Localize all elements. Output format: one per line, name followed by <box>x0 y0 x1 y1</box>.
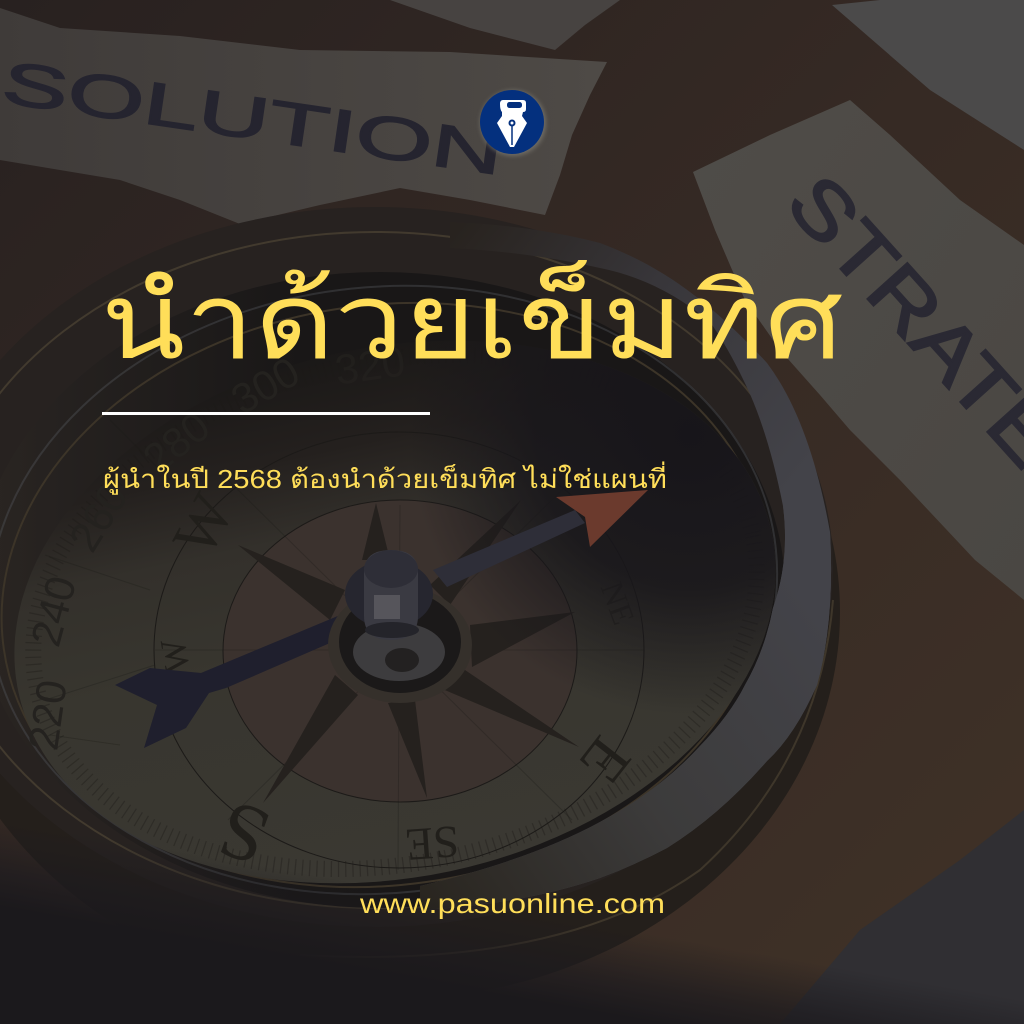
compass needle red tip <box>556 490 648 547</box>
title: นำด้วยเข็มทิศ <box>101 259 843 381</box>
compass dial <box>0 273 827 951</box>
compass bearings: 320 <box>332 337 408 394</box>
compass letters: W <box>160 483 248 567</box>
compass letters: W <box>152 636 198 676</box>
compass bearings: 260 <box>60 475 137 559</box>
paper scrap: solution: SOLUTION <box>0 49 508 188</box>
compass letters: E <box>567 724 643 796</box>
compass outer case <box>0 224 840 1000</box>
compass <box>0 207 840 1000</box>
compass letters <box>152 483 643 884</box>
compass silver ring <box>420 222 831 910</box>
compass dial rings <box>0 290 805 934</box>
compass bearings: 220 <box>19 677 76 753</box>
subtitle: ผู้นำในปี 2568 ต้องนำด้วยเข็มทิศ ไม่ใช่แผนที่ <box>103 461 667 495</box>
compass letters: SE <box>403 816 461 871</box>
paper scrap: solution <box>0 8 607 224</box>
compass needle blue end <box>115 613 360 748</box>
compass letters: S <box>206 783 280 884</box>
compass rose <box>238 500 579 803</box>
compass bearings <box>19 337 408 753</box>
divider line <box>102 412 430 415</box>
compass bearings: 300 <box>223 348 307 423</box>
compass needle steel end <box>433 510 585 587</box>
compass bearings: 280 <box>134 402 218 482</box>
logo: pen nib badge <box>480 90 546 156</box>
compass hub <box>328 550 472 703</box>
compass inner brown field <box>223 500 577 802</box>
website url: www.pasuonline.com <box>359 888 665 919</box>
compass inner wall <box>0 272 785 908</box>
compass letters: NE <box>594 577 642 629</box>
paper scraps: corners <box>390 0 1024 1024</box>
compass top rim <box>0 207 833 927</box>
dial right shadow <box>0 273 827 951</box>
paper scrap: strategy <box>693 100 1024 600</box>
compass bearings: 240 <box>22 571 85 651</box>
